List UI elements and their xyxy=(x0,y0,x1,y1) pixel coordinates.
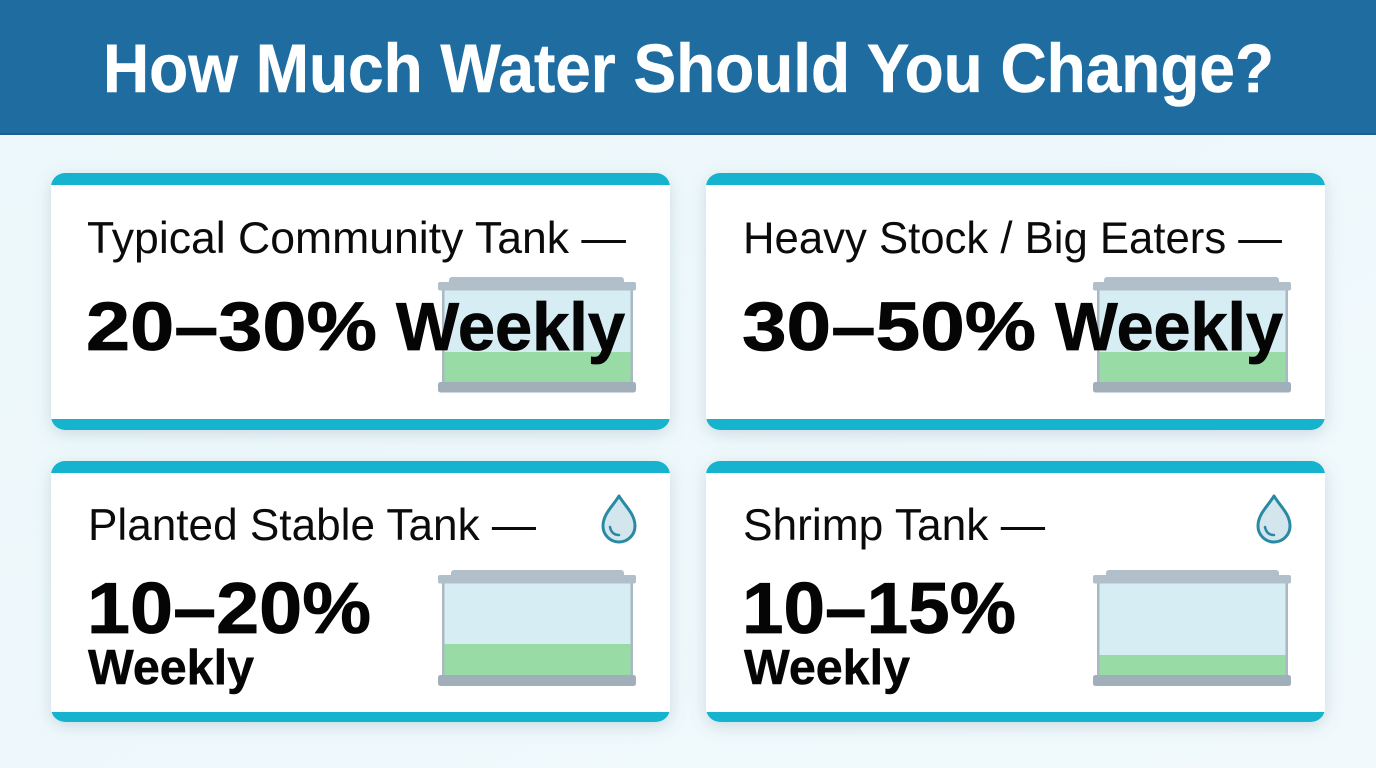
panel: typical community tank xyxy=(51,173,670,430)
icon: water drop xyxy=(603,496,635,542)
title: How Much Water Should You Change? xyxy=(103,30,1274,107)
icon: aquarium tank 10-15% xyxy=(1093,570,1291,686)
icon: water drop xyxy=(1258,496,1290,542)
label: shrimp tank: Shrimp Tank — xyxy=(743,501,1045,550)
value: 20-30%: 20–30% xyxy=(86,288,377,365)
value: weekly: Weekly xyxy=(88,641,254,695)
value: weekly: Weekly xyxy=(1055,289,1283,365)
value: weekly: Weekly xyxy=(744,641,910,695)
panel: heavy stock xyxy=(706,173,1325,430)
icon: aquarium tank 10-20% xyxy=(438,570,636,686)
label: planted stable tank: Planted Stable Tank — xyxy=(88,501,536,550)
panel: shrimp tank xyxy=(706,461,1325,722)
value: 30-50%: 30–50% xyxy=(742,288,1036,365)
value: 10-15%: 10–15% xyxy=(742,569,1016,649)
label: heavy stock: Heavy Stock / Big Eaters — xyxy=(743,214,1282,263)
label: typical community tank: Typical Community Tank — xyxy=(87,214,626,263)
icon: aquarium tank 20-30% xyxy=(438,277,636,392)
value: 10-20%: 10–20% xyxy=(87,569,371,649)
value: weekly: Weekly xyxy=(396,289,625,365)
header banner xyxy=(0,0,1376,135)
panel: planted stable tank xyxy=(51,461,670,722)
icon: aquarium tank 30-50% xyxy=(1093,277,1291,392)
